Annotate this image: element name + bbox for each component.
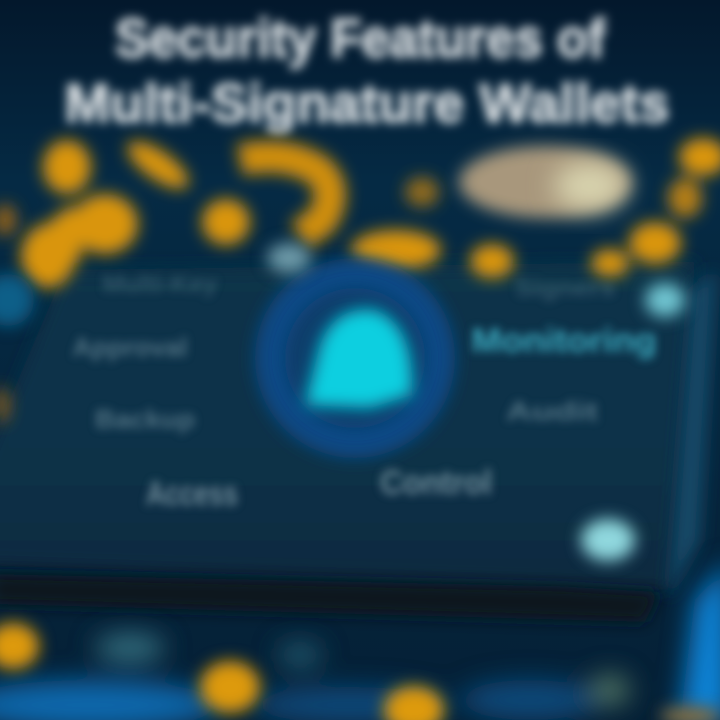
panel labels: Audit <box>506 396 598 426</box>
board dark base strip <box>0 574 660 622</box>
panel: device board <box>0 262 716 622</box>
panel labels: Approval <box>72 332 188 362</box>
panel labels: Signers <box>515 275 615 302</box>
title: Multi-Signature Wallets <box>64 72 670 134</box>
icon: cyan lock <box>305 309 412 408</box>
panel labels <box>72 271 615 513</box>
beige coin <box>459 146 631 218</box>
shield circle icon <box>255 258 455 458</box>
gold question-mark shape <box>240 157 330 236</box>
panel labels: Access <box>146 475 238 513</box>
highlighted label: Monitoring <box>472 322 656 360</box>
coin highlight <box>554 162 626 210</box>
board right edge <box>668 270 716 600</box>
gold coins centre and right <box>0 138 720 423</box>
panel labels: Backup <box>95 404 195 434</box>
panel labels: Multi-Key <box>102 271 218 298</box>
small glowing nodes <box>0 243 685 561</box>
lower blue glow strip <box>0 560 720 720</box>
title: Security Features of <box>115 7 606 69</box>
panel labels: Control <box>380 464 492 502</box>
gold coins bottom <box>0 623 720 720</box>
gold coins cluster left <box>21 133 250 288</box>
title <box>64 7 670 134</box>
